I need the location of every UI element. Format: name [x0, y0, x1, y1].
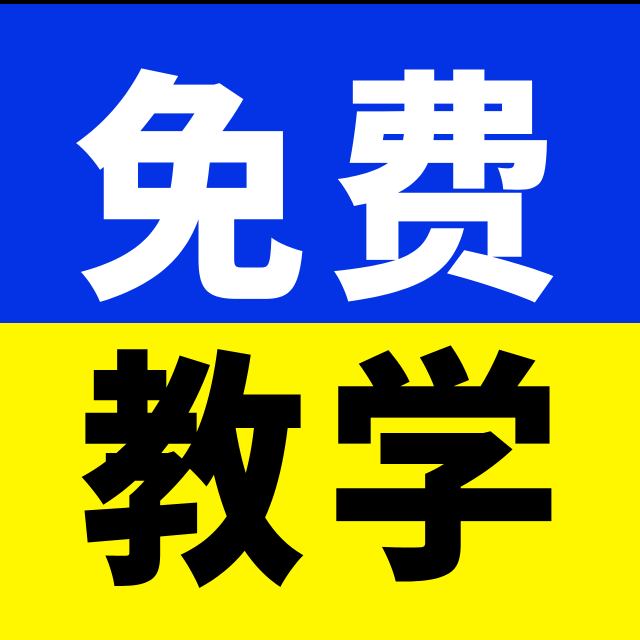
heading: free	[74, 58, 558, 332]
heading: teaching: 教	[80, 337, 306, 616]
heading: free: 费	[329, 58, 558, 332]
heading: teaching: 学	[324, 336, 563, 612]
panel: yellow bottom band	[0, 323, 640, 640]
heading: free: 免	[74, 58, 308, 332]
panel: blue top band	[0, 4, 640, 332]
heading: teaching	[80, 336, 563, 616]
top edge bar	[0, 0, 640, 4]
